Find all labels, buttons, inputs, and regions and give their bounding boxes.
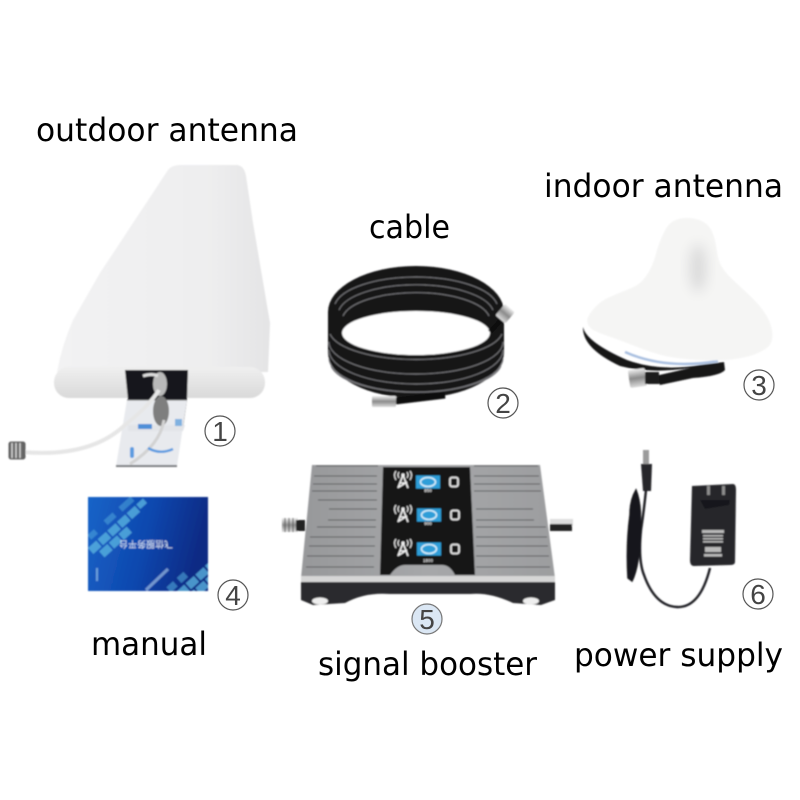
band labels: 1800: [423, 558, 434, 563]
heading: cable: cable: [369, 208, 450, 246]
number 4: [218, 580, 248, 611]
number 1: [205, 416, 235, 447]
number 2: [488, 388, 518, 419]
manual cover title: 飞信服务平台: [119, 538, 173, 551]
icon: signal booster: [282, 465, 573, 605]
connector: left port: [282, 518, 305, 532]
number 3: [744, 370, 774, 401]
connector: right port: [550, 519, 573, 531]
number 5: [412, 604, 442, 635]
adapter rating label: [702, 530, 724, 556]
number 1: 1: [212, 416, 228, 447]
band labels: 850: [424, 488, 432, 493]
number 4: 4: [225, 580, 241, 611]
icon: outdoor antenna: [9, 165, 270, 467]
icon: cable coil: [328, 266, 515, 407]
number 6: [743, 579, 773, 610]
heading: manual: manual: [91, 625, 207, 663]
band labels: [423, 488, 434, 563]
icon: power supply: [627, 450, 736, 607]
band labels: 900: [424, 521, 432, 526]
number 3: 3: [751, 370, 767, 401]
heading: outdoor antenna: outdoor antenna: [36, 111, 298, 149]
icon: indoor antenna: [583, 218, 772, 388]
heading: signal booster: signal booster: [318, 645, 538, 683]
number 6: 6: [750, 579, 766, 610]
icon: manual: [86, 496, 210, 592]
heading: indoor antenna: indoor antenna: [544, 167, 783, 205]
number 2: 2: [495, 388, 511, 419]
number 5: 5: [419, 604, 435, 635]
heading: power supply: power supply: [574, 636, 783, 674]
